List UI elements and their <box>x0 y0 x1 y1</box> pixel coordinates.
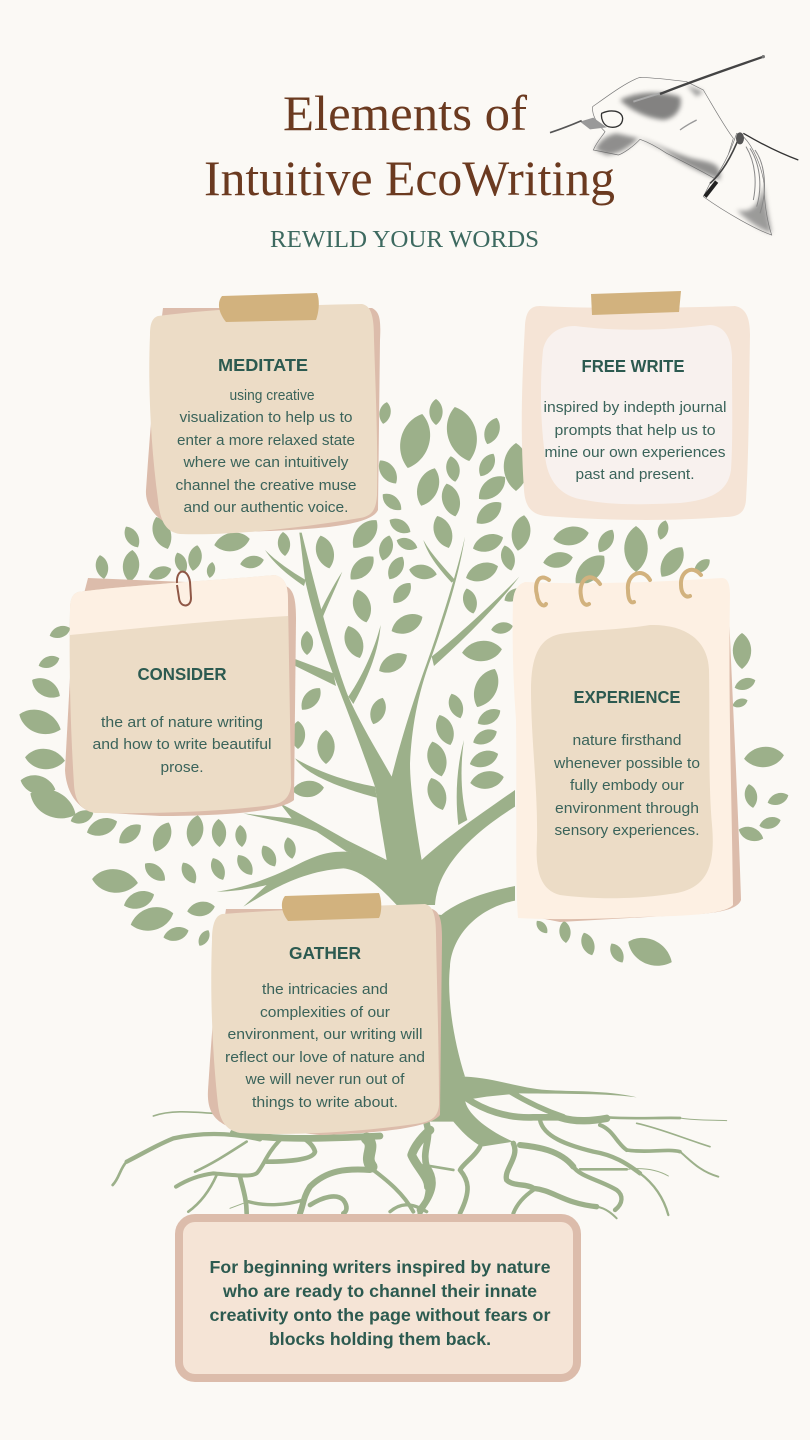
heading: GATHER <box>289 943 361 963</box>
tree leaves <box>15 399 790 973</box>
callout text: For beginning writers inspired by nature <box>210 1257 551 1277</box>
callout text <box>210 1257 551 1349</box>
body text <box>225 982 425 1111</box>
body text: we will never run out of <box>244 1072 406 1088</box>
subtitle: REWILD YOUR WORDS <box>270 227 539 253</box>
sheet shadow <box>146 308 380 532</box>
title: Intuitive EcoWriting <box>204 150 615 206</box>
body text: and our authentic voice. <box>184 500 348 516</box>
body text: visualization to help us to <box>180 410 352 426</box>
outer sheet <box>522 306 750 520</box>
callout text: creativity onto the page without fears or <box>210 1305 551 1325</box>
heading: CONSIDER <box>138 664 227 684</box>
body text: where we can intuitively <box>182 455 349 471</box>
body text <box>553 733 700 839</box>
panel: consider <box>65 572 296 816</box>
body text: prose. <box>160 760 204 776</box>
body text <box>544 400 726 483</box>
tree roots left <box>113 1112 430 1213</box>
body text: nature firsthand <box>572 733 682 749</box>
tree trunk and branches <box>217 533 519 907</box>
sheet shadow <box>65 578 296 816</box>
body text: environment through <box>555 801 699 817</box>
tree lower limb and trunk base <box>430 886 515 1080</box>
body text <box>176 388 356 516</box>
sheet top band <box>70 575 288 635</box>
tape <box>282 893 381 921</box>
body text: past and present. <box>576 467 694 483</box>
tree illustration <box>15 399 790 1218</box>
title: Elements of <box>283 85 527 141</box>
body text: fully embody our <box>570 778 684 794</box>
body text: things to write about. <box>252 1095 398 1111</box>
sheet shadow <box>540 580 741 922</box>
sheet <box>149 304 377 534</box>
inner sheet <box>541 325 732 504</box>
panel: free write <box>522 291 750 520</box>
body text: using creative <box>230 388 314 404</box>
icon: hand holding pen <box>550 55 798 235</box>
panel: meditate <box>146 293 380 534</box>
panel: experience <box>513 570 741 922</box>
callout box <box>179 1218 577 1378</box>
heading: EXPERIENCE <box>574 687 680 707</box>
inner panel <box>531 625 713 898</box>
body text: sensory experiences. <box>554 823 700 839</box>
body text: the art of nature writing <box>101 715 263 731</box>
body text: and how to write beautiful <box>92 737 272 753</box>
body text: environment, our writing will <box>228 1027 422 1043</box>
tree roots right <box>417 1077 727 1218</box>
body text: enter a more relaxed state <box>177 433 355 449</box>
body text: whenever possible to <box>553 756 700 772</box>
body text: mine our own experiences <box>544 445 726 461</box>
body text: reflect our love of nature and <box>225 1050 425 1066</box>
sheet <box>211 904 439 1134</box>
tape <box>219 293 319 322</box>
title <box>204 85 615 206</box>
spiral rings <box>536 570 701 606</box>
heading: MEDITATE <box>218 355 308 375</box>
sheet <box>70 575 291 813</box>
body text: channel the creative muse <box>176 478 356 494</box>
body text: the intricacies and <box>262 982 388 998</box>
tape <box>591 291 681 315</box>
panel: gather <box>208 893 442 1135</box>
icon: paper clip <box>177 572 191 606</box>
sheet <box>513 578 733 919</box>
body text: inspired by indepth journal <box>544 400 726 416</box>
callout: audience statement <box>179 1218 577 1378</box>
body text: complexities of our <box>260 1005 390 1021</box>
body text: prompts that help us to <box>554 423 716 439</box>
callout text: who are ready to channel their innate <box>222 1281 537 1301</box>
callout text: blocks holding them back. <box>269 1329 491 1349</box>
body text <box>92 715 272 776</box>
heading: FREE WRITE <box>582 356 684 376</box>
sheet shadow <box>208 909 442 1135</box>
